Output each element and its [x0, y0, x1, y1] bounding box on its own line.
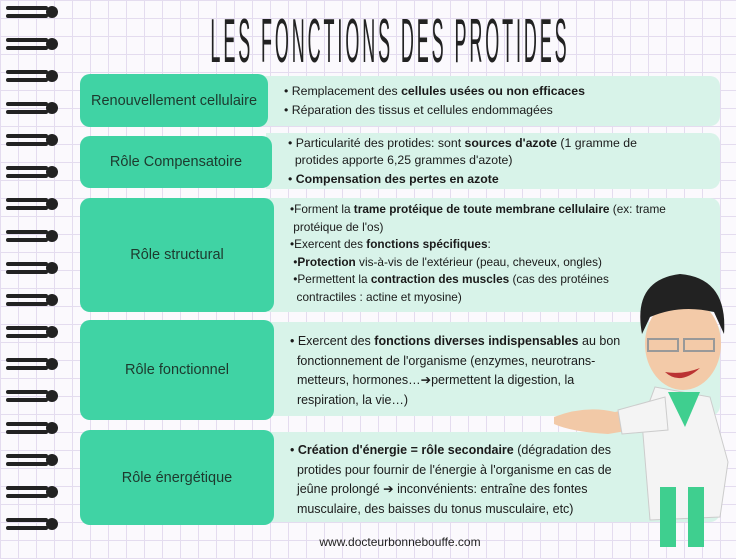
- row 4 text: • Exercent des fonctions diverses indispensables au bon: [290, 334, 620, 348]
- footer url: www.docteurbonnebouffe.com: [319, 535, 481, 549]
- row 4 text: fonctionnement de l'organisme (enzymes, neurotrans-: [297, 354, 595, 368]
- row 5 text: musculaire, des baisses du tonus musculaire, etc): [297, 502, 573, 516]
- row 3 text: [268, 198, 720, 312]
- row 5 text: jeûne prolongé ➔ inconvénients: entraîne des fontes: [297, 482, 587, 496]
- row 3 label: [80, 198, 274, 312]
- row 5 text: protides pour fournir de l'énergie à l'organisme en cas de: [297, 462, 612, 476]
- row 1 label: [80, 74, 268, 127]
- row 1 text: [262, 76, 720, 126]
- row 3 text: •Protection vis-à-vis de l'extérieur (peau, cheveux, ongles): [293, 254, 602, 268]
- row 3 text: •Forment la trame protéique de toute membrane cellulaire (ex: trame: [290, 202, 666, 216]
- row 5 text: [268, 432, 720, 522]
- row 5 label: [80, 430, 274, 525]
- row 1 text: • Remplacement des cellules usées ou non efficaces: [284, 84, 585, 98]
- row 3 text: •Exercent des fonctions spécifiques:: [290, 237, 491, 251]
- row 5 label: Rôle énergétique: [122, 470, 232, 486]
- row 3 text: protéique de l'os): [293, 220, 383, 234]
- row 2 text: • Particularité des protides: sont sources d'azote (1 gramme de: [288, 136, 637, 150]
- row 4 text: respiration, la vie…): [297, 392, 408, 406]
- row 2 label: Rôle Compensatoire: [110, 154, 242, 170]
- spiral binding: [6, 6, 58, 530]
- row 5 text: • Création d'énergie = rôle secondaire (dégradation des: [290, 443, 611, 457]
- doctor illustration: [554, 274, 728, 547]
- row 2 text: [266, 133, 720, 189]
- row 1 label: Renouvellement cellulaire: [91, 92, 257, 108]
- row 4 text: [268, 322, 720, 416]
- row 2 text: • Compensation des pertes en azote: [288, 172, 499, 186]
- row 2 label: [80, 136, 272, 188]
- title: LES FONCTIONS DES PROTIDES: [210, 7, 570, 76]
- row 4 label: Rôle fonctionnel: [125, 362, 229, 378]
- row 3 text: •Permettent la contraction des muscles (cas des protéines: [293, 272, 609, 286]
- row 4 text: metteurs, hormones…➔permettent la digestion, la: [297, 373, 574, 387]
- row 3 label: Rôle structural: [130, 247, 224, 263]
- row 1 text: • Réparation des tissus et cellules endommagées: [284, 103, 553, 117]
- row 3 text: contractiles : actine et myosine): [297, 290, 462, 304]
- row 4 label: [80, 320, 274, 420]
- row 2 text: protides apporte 6,25 grammes d'azote): [295, 153, 512, 167]
